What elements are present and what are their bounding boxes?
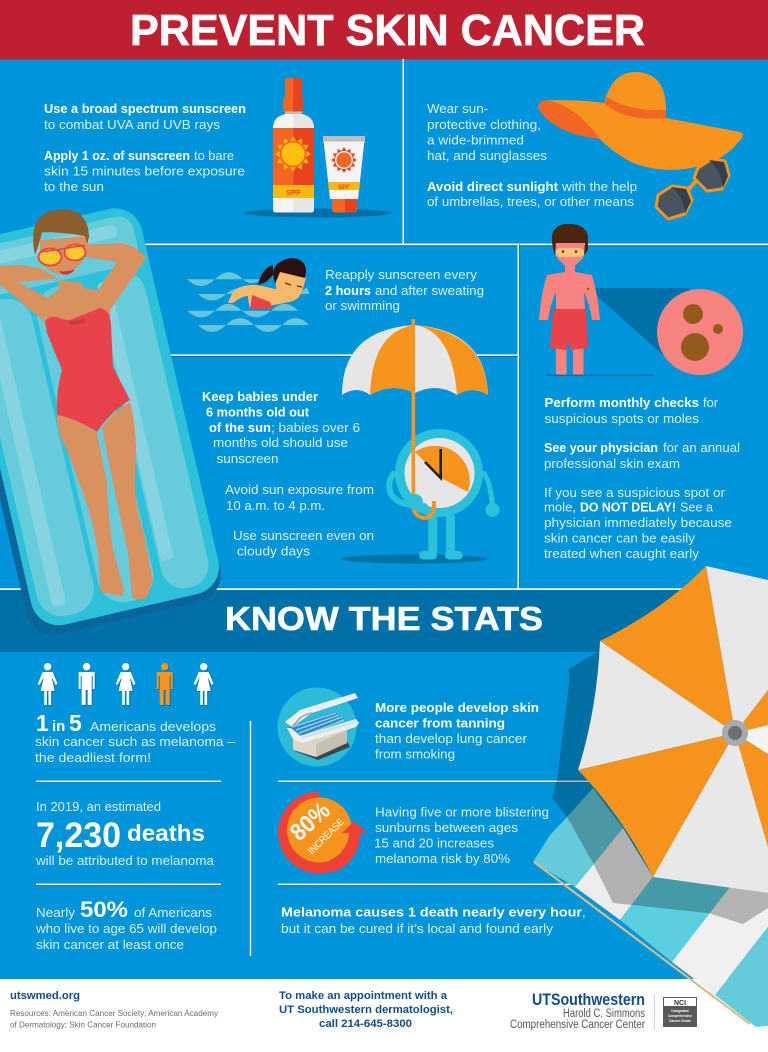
text: skin check advice: mole, bbox=[544, 500, 576, 514]
footer: Designated bbox=[671, 1009, 689, 1013]
header banner: PREVENT SKIN CANCER bbox=[130, 6, 645, 55]
stat: 1 in 5 Americans: 1 bbox=[36, 710, 49, 736]
text: sunscreen advice: Apply 1 oz. of sunscreen bbox=[44, 148, 190, 163]
header banner bbox=[0, 0, 768, 60]
text: melanoma death stat: but it can be cured if it’s local and found early bbox=[281, 921, 553, 936]
icon: sun hat bbox=[538, 72, 743, 170]
text: babies, timing and cloudy days: cloudy days bbox=[237, 544, 310, 558]
footer: Comprehensive bbox=[668, 1014, 692, 1018]
text: skin check advice: skin cancer can be easily bbox=[544, 530, 695, 546]
icon: boy with moles bbox=[539, 224, 743, 376]
icon: 80 percent increase badge bbox=[278, 792, 367, 873]
stat: 1 in 5 Americans bbox=[35, 710, 236, 765]
icon: tanning bed bbox=[278, 688, 359, 766]
footer: of Dermatology; Skin Cancer Foundation bbox=[10, 1020, 156, 1030]
stat: nearly 50 percent: who live to age 65 will develop bbox=[35, 921, 217, 936]
footer: call 214-645-8300 bbox=[319, 1018, 412, 1030]
text: skin check advice: professional skin exam bbox=[544, 456, 680, 471]
text: babies, timing and cloudy days: 6 months old out bbox=[206, 404, 310, 420]
text: melanoma death stat: Melanoma causes 1 death nearly every hour bbox=[281, 905, 582, 920]
text: clothing and shade advice: of umbrellas, trees, or other means bbox=[427, 194, 634, 209]
icon: swimmer bbox=[187, 258, 309, 332]
text: clothing and shade advice: with the help bbox=[561, 179, 637, 194]
text: melanoma death stat bbox=[281, 905, 586, 936]
text: skin check advice: treated when caught early bbox=[544, 546, 699, 561]
text: babies, timing and cloudy days: months old should use bbox=[213, 435, 348, 450]
stat: 7,230 deaths: deaths bbox=[127, 820, 205, 846]
text: sunburn stat: 15 and 20 increases bbox=[374, 836, 494, 851]
text: tanning stat: cancer from tanning bbox=[375, 716, 505, 731]
text: clothing and shade advice: a wide-brimmed bbox=[427, 133, 524, 148]
stats heading band: KNOW THE STATS bbox=[225, 600, 543, 637]
text: sunscreen advice bbox=[44, 101, 246, 194]
text: sunscreen advice: to the sun bbox=[44, 179, 104, 194]
text: sunburn stat: sunburns between ages bbox=[375, 820, 518, 835]
text: skin check advice: for bbox=[703, 395, 719, 410]
stat: 7,230 deaths: will be attributed to melanoma bbox=[35, 853, 215, 868]
footer: NCI bbox=[674, 1000, 686, 1007]
footer: Cancer Center bbox=[669, 1019, 692, 1023]
text: babies, timing and cloudy days: sunscreen bbox=[216, 451, 278, 466]
text: babies, timing and cloudy days: Keep babies under bbox=[202, 389, 318, 404]
illustration: woman on pool float bbox=[0, 203, 226, 640]
icon: 80 percent increase badge: INCREASE bbox=[306, 817, 347, 857]
stat: nearly 50 percent: Nearly bbox=[36, 905, 75, 920]
stat: nearly 50 percent: 50% bbox=[80, 897, 128, 922]
text: clothing and shade advice: hat, and sunglasses bbox=[427, 148, 547, 163]
text: sunburn stat: melanoma risk by 80% bbox=[375, 851, 510, 866]
text: babies, timing and cloudy days: of the sun bbox=[209, 420, 271, 435]
text: sunscreen advice: skin 15 minutes before exposure bbox=[44, 164, 245, 178]
footer: utswmed.org bbox=[10, 990, 80, 1002]
footer: UT Southwestern dermatologist, bbox=[279, 1004, 453, 1016]
text: tanning stat bbox=[375, 700, 539, 762]
stat: 1 in 5 Americans: in bbox=[52, 718, 65, 735]
text: tanning stat: More people develop skin bbox=[375, 700, 539, 715]
stat: 7,230 deaths: 7,230 bbox=[36, 816, 121, 855]
stat: 7,230 deaths bbox=[35, 799, 215, 868]
text: reapply sunscreen: and after sweating bbox=[375, 283, 484, 298]
text: skin check advice: suspicious spots or moles bbox=[544, 411, 699, 426]
stat: 1 in 5 Americans: 5 bbox=[69, 710, 82, 736]
stats: 1 in 5 figures bbox=[38, 663, 214, 705]
stat: nearly 50 percent bbox=[35, 897, 217, 952]
text: tanning stat: than develop lung cancer bbox=[375, 731, 528, 746]
text: clothing and shade advice: protective clothing, bbox=[427, 117, 541, 132]
text: babies, timing and cloudy days: Use sunscreen even on bbox=[233, 528, 374, 543]
text: skin check advice: for an annual bbox=[663, 440, 740, 455]
footer: Harold C. Simmons bbox=[563, 1008, 645, 1020]
icon: sunscreen bottles bbox=[245, 78, 391, 218]
text: reapply sunscreen bbox=[325, 267, 484, 313]
stat: 1 in 5 Americans: skin cancer such as melanoma – bbox=[35, 734, 236, 749]
stat: 1 in 5 Americans: the deadliest form! bbox=[35, 750, 151, 765]
text: skin check advice: See your physician bbox=[544, 440, 658, 455]
text: skin check advice: See a bbox=[680, 500, 714, 514]
stat: 1 in 5 Americans: Americans develops bbox=[90, 719, 216, 734]
text: sunscreen advice: to bare bbox=[194, 148, 234, 163]
footer: Resources: American Cancer Society; American Academy bbox=[10, 1009, 218, 1018]
text: melanoma death stat: , bbox=[582, 905, 586, 920]
stat: 7,230 deaths: In 2019, an estimated bbox=[36, 799, 161, 814]
text: reapply sunscreen: 2 hours bbox=[325, 283, 371, 298]
text: reapply sunscreen: Reapply sunscreen every bbox=[325, 267, 477, 282]
text: skin check advice: If you see a suspicious spot or bbox=[544, 485, 726, 500]
icon: 80 percent increase badge: 80% bbox=[285, 797, 336, 846]
footer: To make an appointment with a bbox=[279, 990, 448, 1002]
text: skin check advice: DO NOT DELAY! bbox=[580, 500, 676, 514]
icon: sunglasses bbox=[656, 159, 729, 219]
text: babies, timing and cloudy days bbox=[202, 389, 374, 558]
text: sunscreen advice: to combat UVA and UVB rays bbox=[44, 117, 220, 132]
footer: UTSouthwestern bbox=[532, 991, 645, 1009]
text: skin check advice: physician immediately because bbox=[544, 515, 732, 530]
text: tanning stat: from smoking bbox=[375, 747, 455, 762]
text: babies, timing and cloudy days: 10 a.m. to 4 p.m. bbox=[226, 498, 325, 513]
text: reapply sunscreen: or swimming bbox=[325, 298, 400, 313]
footer bbox=[0, 979, 768, 1052]
text: sunscreen advice: Use a broad spectrum sunscreen bbox=[44, 101, 246, 116]
text: sunburn stat: Having five or more blistering bbox=[375, 805, 549, 820]
footer: Comprehensive Cancer Center bbox=[510, 1019, 645, 1031]
text: clothing and shade advice: Wear sun- bbox=[427, 101, 488, 116]
text: babies, timing and cloudy days: ; babies over 6 bbox=[271, 420, 360, 435]
icon: sunscreen bottles: SPF bbox=[338, 185, 350, 191]
text: clothing and shade advice bbox=[427, 101, 637, 209]
icon: sunscreen bottles: SPF bbox=[286, 188, 301, 197]
icon: umbrella and clock character bbox=[341, 319, 500, 564]
stats heading band bbox=[0, 590, 685, 652]
stat: nearly 50 percent: skin cancer at least once bbox=[36, 937, 184, 952]
text: sunburn stat bbox=[374, 805, 549, 866]
stat: nearly 50 percent: of Americans bbox=[134, 905, 212, 920]
illustration: beach parasol bbox=[533, 566, 768, 1027]
text: skin check advice bbox=[544, 395, 740, 561]
text: clothing and shade advice: Avoid direct sunlight bbox=[427, 179, 559, 194]
text: skin check advice: Perform monthly checks bbox=[544, 395, 699, 410]
text: babies, timing and cloudy days: Avoid sun exposure from bbox=[225, 482, 374, 497]
